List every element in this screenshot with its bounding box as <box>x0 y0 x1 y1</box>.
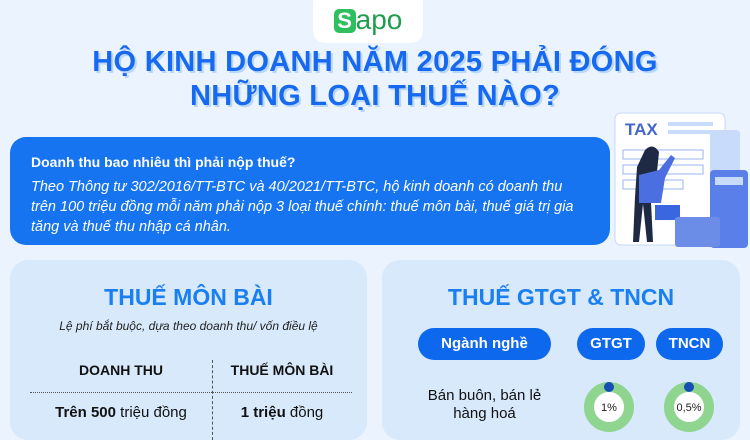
row text: hàng hoá <box>453 405 516 422</box>
title: HỘ KINH DOANH NĂM 2025 PHẢI ĐÓNG <box>92 46 658 78</box>
pill: TNCN <box>656 328 723 360</box>
table: THUẾ MÔN BÀI <box>231 362 333 378</box>
donut: 0,5%: 0,5% <box>676 402 702 414</box>
table <box>30 360 352 440</box>
pill: GTGT <box>577 328 645 360</box>
title: NHỮNG LOẠI THUẾ NÀO? <box>190 80 560 112</box>
pill: TNCN: TNCN <box>669 335 710 352</box>
table: Trên 500 triệu đồng <box>55 404 187 421</box>
logo: S <box>337 8 352 33</box>
intro heading: Doanh thu bao nhiêu thì phải nộp thuế? <box>31 154 295 170</box>
title <box>92 45 658 112</box>
table: DOANH THU <box>79 362 163 378</box>
intro box <box>10 137 610 245</box>
subtitle: Lệ phí bắt buộc, dựa theo doanh thu/ vốn điều lệ <box>59 319 318 333</box>
logo <box>313 0 423 43</box>
illustration: tax form <box>614 112 748 248</box>
panel: thuế môn bài <box>10 260 367 440</box>
row text: Bán buôn, bán lẻ <box>428 387 541 404</box>
donut: 1% <box>584 382 634 432</box>
donut: 0,5% <box>664 382 714 432</box>
row text <box>428 387 541 422</box>
illustration: tax form: TAX <box>625 120 658 139</box>
heading: THUẾ GTGT & TNCN <box>448 284 674 310</box>
donut: 1%: 1% <box>601 402 617 414</box>
table: 1 triệu đồng <box>241 404 323 421</box>
heading: THUẾ MÔN BÀI <box>104 284 273 310</box>
pill: ngành nghề <box>418 328 551 360</box>
intro text: Theo Thông tư 302/2016/TT-BTC và 40/2021/TT-BTC, hộ kinh doanh có doanh thu trên 100 triệu đồng mỗi năm phải nộp 3 loại thuế chính: thuế môn bài, thuế giá trị gia tăng và thuế thu nhập cá nhân. <box>31 179 574 235</box>
panel: GTGT & TNCN <box>382 260 740 440</box>
pill: ngành nghề: Ngành nghề <box>441 335 528 352</box>
pill: GTGT: GTGT <box>590 335 632 352</box>
logo: apo <box>356 4 402 35</box>
